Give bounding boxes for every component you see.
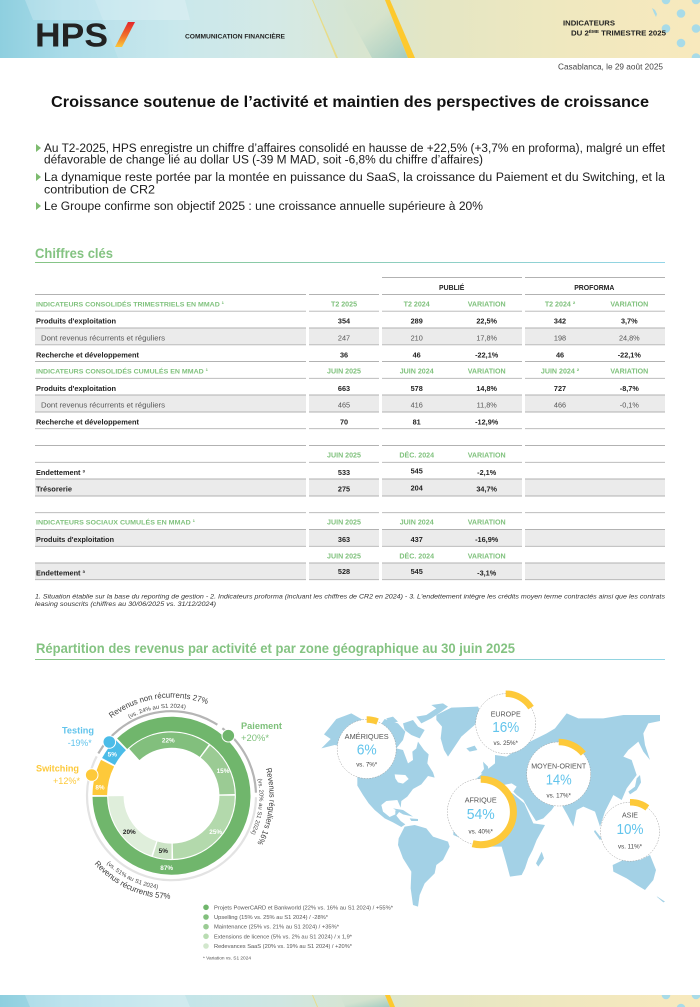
bubble: Afrique: AFRIQUE [465,796,497,804]
row: endettement: Endettement ³ [36,468,86,477]
row: header endettement social [327,551,506,560]
bubble: Moyen-Orient: MOYEN-ORIENT [531,761,587,770]
row: header cumulé: JUIN 2025 [327,368,361,376]
row: revenus récurrents T2: 24,8% [619,333,640,342]
world map: Americas, Greenland [321,703,489,907]
row: endettement social: 545 [411,567,423,576]
row: produits d'exploitation T2: 3,7% [621,317,638,326]
legend item: projets: Projets PowerCARD et Bankworld (22% vs. 16% au S1 2024) / +55%* [214,905,394,911]
row: produits d'exploitation sociaux: -16,9% [475,535,499,544]
footnotes: leasing souscrits (chiffres au 30/06/2025 vs. 31/12/2024) [35,601,216,608]
header banner [0,0,700,62]
bubble: Europe: EUROPE [491,709,521,718]
row: header sociaux: VARIATION [468,519,506,527]
bubble: Afrique [447,779,514,845]
segment values: 15% [217,768,230,775]
row: trésorerie: Trésorerie [36,485,72,494]
bubble: Asie: 10% [616,822,644,838]
bubble: Afrique: vs. 40%* [468,828,493,836]
date: Casablanca, le 29 août 2025 [558,62,663,72]
legend item: extensions: Extensions de licence (5% vs. 2% au S1 2024) / x 1,9* [214,934,353,940]
bubble: Europe: 16% [492,720,519,736]
row: trésorerie [36,483,498,494]
marker dots [85,729,235,781]
bubble: Asie: vs. 11%* [618,843,643,850]
row: produits d'exploitation sociaux: Produits d'exploitation [36,535,114,544]
row: header endettement: VARIATION [468,452,506,460]
bubble: Europe [476,694,536,754]
row: R&D T2: -22,1% [475,350,499,359]
row: produits d'exploitation T2: Produits d'exploitation [36,317,116,326]
row: endettement social: Endettement ³ [36,568,86,577]
outer ring segments [70,694,273,897]
segment values: 20% [123,829,136,836]
bullet 3: Le Groupe confirme son objectif 2025 : une croissance annuelle supérieure à 20% [44,199,483,213]
row: revenus récurrents cumulés: 466 [554,401,566,410]
logo: HPS: HPS [35,18,108,55]
bubble: Asie: ASIE [622,810,638,820]
row: header trimestriel: T2 2024 [404,301,430,309]
bullet 2: contribution de CR2 [44,182,155,196]
row: trésorerie: 275 [338,485,350,494]
row: revenus récurrents cumulés [41,401,639,410]
bubble: Amériques [337,720,396,778]
group headers: publié, proforma: PUBLIÉ [439,283,465,292]
row: R&D cumulé: 81 [413,417,421,426]
bubble: Europe: vs. 25%* [493,740,518,747]
legend [203,904,394,960]
bubble: Amériques: AMÉRIQUES [345,732,389,741]
row: R&D T2: 46 [413,350,421,359]
row: endettement: 533 [338,468,350,477]
bubble: Moyen-Orient [527,742,591,806]
legend item: maintenance: Maintenance (25% vs. 21% au S1 2024) / +35%* [214,925,340,931]
row: produits d'exploitation sociaux: 363 [338,535,350,544]
row: produits d'exploitation sociaux: 437 [411,535,423,544]
row: R&D cumulé: -12,9% [475,417,499,426]
row: header trimestriel: T2 2025 [331,301,357,309]
label: paiement: +20%* [241,733,270,743]
row: produits d'exploitation T2: 354 [338,317,351,326]
title: Croissance soutenue de l’activité et maintien des perspectives de croissance [51,94,649,111]
bubble: Afrique: 54% [467,807,495,823]
bubble: Amériques: 6% [357,742,377,758]
row: R&D T2 [36,350,641,359]
row: R&D T2: Recherche et développement [36,350,140,359]
legend note: * Variation vs. S1 2024 [203,956,252,960]
label: indicateurs du 2ème trimestre: DU 2 [571,28,588,38]
bullet 1: Au T2-2025, HPS enregistre un chiffre d’affaires consolidé en hausse de +22,5% (+3,7% en proforma), malgré un effet [44,141,666,155]
row: header cumulé: INDICATEURS CONSOLIDÉS CUMULÉS EN MMAD ¹ [36,367,209,376]
heading: répartition des revenus: Répartition des revenus par activité et par zone géographique au 30 juin 2025 [36,640,515,656]
row: header cumulé: VARIATION [468,368,506,376]
row: revenus récurrents cumulés: -0,1% [620,401,639,410]
row: produits d'exploitation T2: 289 [411,317,423,326]
row: revenus récurrents T2 [41,333,640,342]
row: R&D cumulé: Recherche et développement [36,417,140,426]
row: header trimestriel: VARIATION [468,301,506,309]
row: produits d'exploitation T2: 342 [554,317,566,326]
row: revenus récurrents cumulés: 11,8% [477,401,497,410]
label: indicateurs du 2ème trimestre [563,18,666,38]
row: header trimestriel: T2 2024 ² [545,301,576,309]
bubble: Amériques: vs. 7%* [356,762,378,768]
row: revenus récurrents T2: 210 [411,333,423,342]
label: indicateurs du 2ème trimestre: TRIMESTRE 2025 [599,28,666,38]
row: endettement: -2,1% [477,468,497,477]
row: header endettement social: VARIATION [468,552,506,560]
bullet 1: défavorable de change lié au dollar US (-39 M MAD, soit -6,8% du chiffre d’affaires) [44,153,483,167]
row: header cumulé: JUIN 2024 ² [541,368,580,376]
row: trésorerie: 34,7% [476,485,498,494]
curved label: revenus réguliers: (vs. 20% au S1 2024) [250,778,264,834]
row: header endettement [327,451,506,460]
row: R&D cumulé: 70 [340,417,348,426]
row: endettement [36,467,497,477]
row: R&D T2: 36 [340,350,348,359]
row: header endettement social: JUIN 2025 [327,552,361,560]
curved label: revenus récurrents: (vs. 51% au S1 2024) [106,862,158,890]
row: endettement social: -3,1% [477,568,497,577]
segment values [95,737,230,872]
segment values: 8% [95,784,105,791]
bubble: Moyen-Orient: vs. 17%* [546,792,571,800]
row: header endettement social: DÉC. 2024 [399,551,434,560]
label: indicateurs du 2ème trimestre: ÈME [589,29,599,34]
row: produits d'exploitation cumulés: 663 [338,384,350,393]
segment values: 25% [209,829,222,836]
label: testing [62,725,94,748]
label: testing: -19%* [68,738,92,748]
row: R&D cumulé [36,417,499,426]
row: revenus récurrents T2: 247 [338,333,350,342]
row: header sociaux: JUIN 2024 [400,519,434,527]
row: header sociaux: JUIN 2025 [327,519,361,527]
row: header cumulé: VARIATION [610,368,648,376]
segment values: 22% [162,737,175,744]
heading: chiffres clés: Chiffres clés [35,245,113,261]
label: indicateurs du 2ème trimestre: INDICATEURS [563,18,615,28]
curved label: revenus non récurrents: (vs. 24% au S1 2024) [128,704,186,719]
label: switching: Switching [36,764,79,774]
row: header trimestriel [36,300,648,309]
row: header endettement: JUIN 2025 [327,452,361,460]
footnotes: 1. Situation établie sur la base du reporting de gestion - 2. Indicateurs proforma (incluant les chiffres de CR2 en 2024) - 3. L'endettement intègre les crédits moyen terme contractés ainsi que les contrats [35,593,666,600]
label: communication financière: COMMUNICATION FINANCIÈRE [185,32,286,41]
footer banner [0,995,700,1007]
curved label: revenus réguliers: Revenus réguliers 16% [258,768,275,845]
row: header trimestriel: INDICATEURS CONSOLIDÉS TRIMESTRIELS EN MMAD ¹ [36,300,225,309]
row: revenus récurrents T2: 198 [554,333,566,342]
row: produits d'exploitation cumulés: 727 [554,384,566,393]
row: header cumulé: JUIN 2024 [400,368,434,376]
row: revenus récurrents T2: Dont revenus récurrents et réguliers [41,333,165,342]
row: endettement social: 528 [338,567,350,576]
bullet 1 [36,141,666,167]
row: header endettement: DÉC. 2024 [399,451,434,460]
row: header sociaux: INDICATEURS SOCIAUX CUMULÉS EN MMAD ¹ [36,518,196,527]
curved label: revenus non récurrents: Revenus non récurrents 27% [108,692,208,718]
row: trésorerie: 204 [411,483,424,492]
segment values: 5% [159,848,168,855]
legend item: redevances: Redevances SaaS (20% vs. 19% au S1 2024) / +20%* [214,944,353,950]
row: revenus récurrents cumulés: 465 [338,401,350,410]
table: chiffres clés [35,278,665,580]
bubble: Moyen-Orient: 14% [546,772,572,788]
row: produits d'exploitation sociaux [36,535,499,544]
world map: Eurasia, Africa, Oceania [453,713,665,902]
row: header cumulé [36,367,648,376]
row: produits d'exploitation cumulés: -8,7% [620,384,639,393]
curved label: revenus récurrents: Revenus récurrents 57% [94,860,170,899]
row: produits d'exploitation cumulés: 14,8% [476,384,498,393]
row: revenus récurrents T2: 17,8% [476,333,498,342]
bullet 2: La dynamique reste portée par la montée en puissance du SaaS, la croissance du Paiement et du Switching, et la [44,170,665,184]
footnotes [35,593,666,608]
row: produits d'exploitation cumulés: Produits d'exploitation [36,384,116,393]
segment values: 5% [108,751,117,758]
row: produits d'exploitation T2 [36,317,638,326]
label: paiement [241,721,282,743]
row: header sociaux [36,518,506,527]
row: R&D T2: 46 [556,350,564,359]
group headers: publié, proforma [439,283,614,292]
row: revenus récurrents cumulés: Dont revenus récurrents et réguliers [41,401,165,410]
row: produits d'exploitation cumulés: 578 [411,384,423,393]
bubble: Asie [600,802,660,861]
label: switching [36,764,80,786]
outer thin ring: catégories de revenus [53,677,290,914]
legend item: upselling: Upselling (15% vs. 25% au S1 2024) / -28%* [214,915,329,921]
bullet list [36,141,666,213]
row: endettement: 545 [411,467,423,476]
segment values: 87% [160,865,173,872]
label: switching: +12%* [53,776,80,786]
label: paiement: Paiement [241,721,282,731]
row: R&D T2: -22,1% [618,350,641,359]
row: produits d'exploitation T2: 22,5% [476,317,498,326]
row: header trimestriel: VARIATION [610,301,648,309]
donut chart: revenus par activité [36,692,282,899]
row: endettement social [36,567,497,577]
label: testing: Testing [62,725,94,735]
inner ring segments [93,717,250,874]
group headers: publié, proforma: PROFORMA [574,285,614,292]
row: produits d'exploitation cumulés [36,384,639,393]
row: revenus récurrents cumulés: 416 [411,401,423,410]
logo: HPS [35,18,135,55]
bullet 2 [36,170,665,196]
